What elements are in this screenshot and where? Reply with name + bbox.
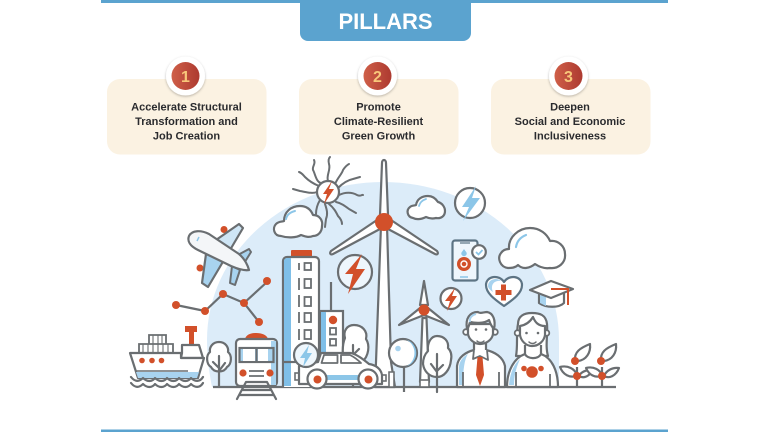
panel: pillar 1: Accelerate Structural bbox=[131, 102, 242, 114]
ground line bbox=[213, 386, 616, 388]
panel: pillar 2: Promote bbox=[356, 102, 401, 114]
panel: pillar 2: Green Growth bbox=[342, 130, 415, 142]
icon: leafy tree bbox=[423, 336, 451, 392]
icon: big cloud bbox=[499, 228, 565, 268]
icon: sun with lightning bbox=[293, 157, 363, 227]
panel: pillar 3: Deepen bbox=[550, 102, 590, 114]
bottom rule bbox=[101, 430, 668, 432]
icon: big wind turbine bbox=[330, 160, 438, 387]
icon: blue lightning circle bbox=[455, 186, 485, 221]
panel: pillar 3 bbox=[491, 56, 650, 154]
icon: cargo ship bbox=[130, 326, 204, 387]
icon: tall building bbox=[283, 250, 319, 387]
figure: man bbox=[457, 312, 505, 387]
icon: lightning circle large bbox=[338, 254, 372, 294]
panel: pillar 2: 2 bbox=[373, 69, 382, 86]
title tab: PILLARS bbox=[338, 9, 433, 34]
icon: train bbox=[236, 333, 277, 399]
panel: pillar 2 bbox=[299, 56, 458, 154]
network of nodes bbox=[172, 277, 271, 326]
panel: pillar 3: Social and Economic bbox=[515, 116, 625, 128]
icon: plants bbox=[560, 344, 619, 387]
icon: cloud right bbox=[408, 196, 445, 219]
panel: pillar 1: 1 bbox=[181, 69, 190, 86]
top rule bbox=[101, 0, 668, 3]
icon: tree behind car bbox=[343, 325, 368, 387]
icon: small lightning circle bbox=[440, 288, 462, 311]
figure: woman bbox=[507, 313, 558, 387]
panel: pillar 3: 3 bbox=[564, 69, 573, 86]
icon: graduation cap bbox=[530, 281, 573, 307]
icon: small wind turbine bbox=[399, 281, 449, 387]
title tab bbox=[300, 0, 471, 41]
panel: pillar 1: Transformation and bbox=[135, 116, 238, 128]
icon: phone with health app bbox=[452, 240, 486, 280]
panel: pillar 3: Inclusiveness bbox=[534, 130, 606, 142]
panel: pillar 1 bbox=[107, 56, 266, 154]
icon: tree by train bbox=[207, 342, 231, 387]
icon: car bbox=[283, 343, 386, 388]
icon: heart with cross bbox=[486, 277, 522, 306]
icon: small building bbox=[320, 282, 343, 381]
icon: airplane bbox=[188, 224, 251, 287]
panel: pillar 1: Job Creation bbox=[153, 130, 220, 142]
background dome bbox=[207, 182, 559, 387]
panel: pillar 2: Climate-Resilient bbox=[334, 116, 423, 128]
icon: round tree bbox=[389, 339, 417, 392]
icon: cloud left bbox=[274, 206, 322, 237]
